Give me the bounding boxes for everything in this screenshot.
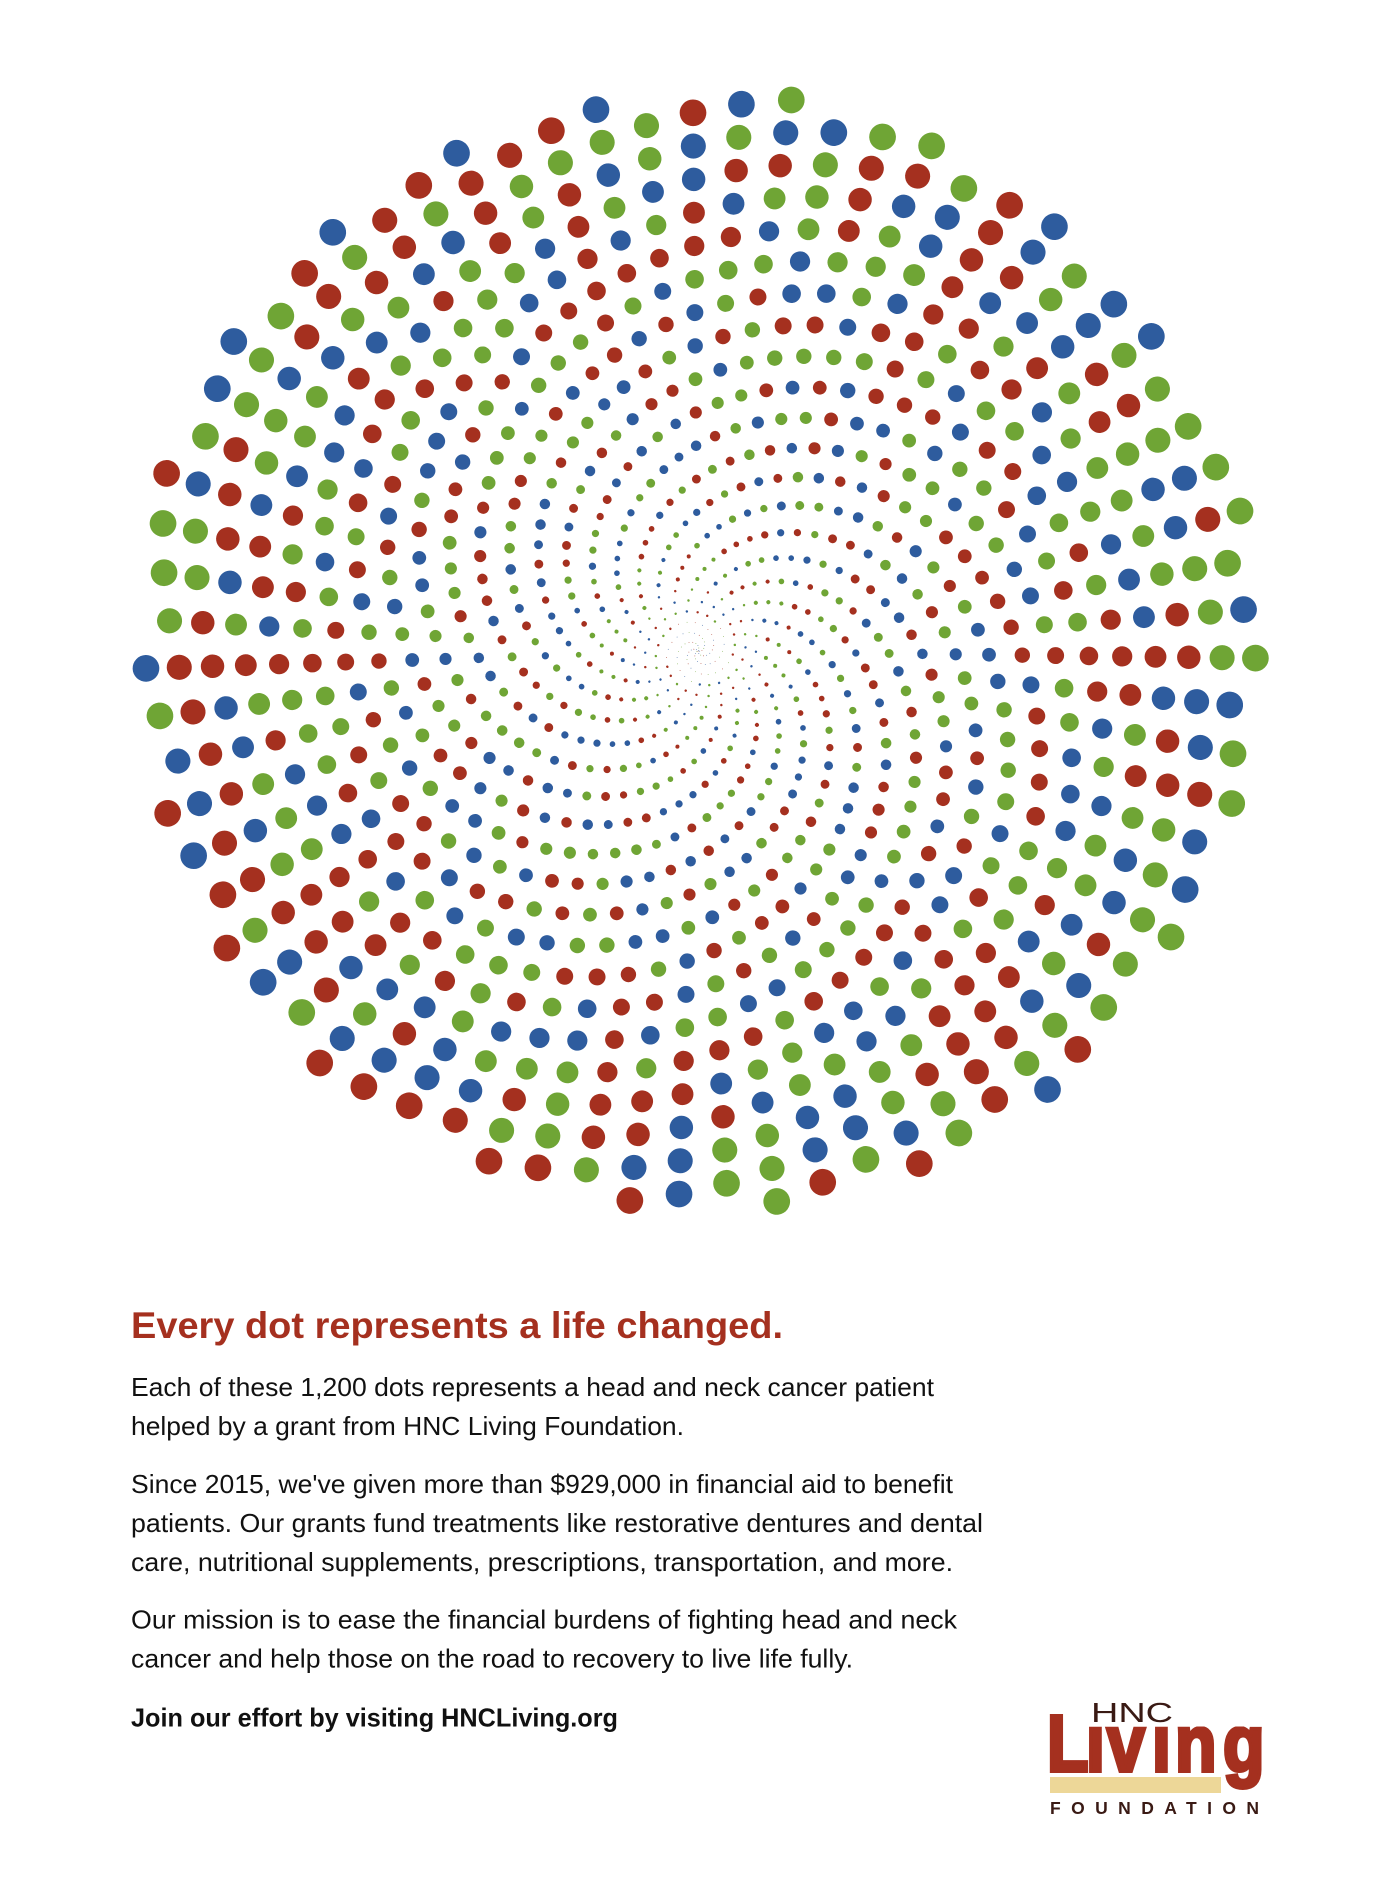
logo text HNC: HNC: [1091, 1697, 1173, 1728]
paragraph: mission: Our mission is to ease the financial burdens of fighting head and neck: [131, 1604, 958, 1634]
paragraph: financial aid: care, nutritional supplements, prescriptions, transportation, and more.: [131, 1547, 953, 1577]
paragraph: financial aid: Since 2015, we've given more than $929,000 in financial aid to benefit: [131, 1469, 954, 1499]
paragraph: dots explanation: [131, 1372, 935, 1441]
paragraph: financial aid: patients. Our grants fund treatments like restorative dentures and dental: [131, 1508, 983, 1538]
logo wordmark Living: Living: [1047, 1699, 1265, 1788]
heading: Every dot represents a life changed.: [131, 1305, 783, 1346]
logo tan bar: [1050, 1777, 1221, 1793]
paragraph: dots explanation: helped by a grant from HNC Living Foundation.: [131, 1411, 684, 1441]
paragraph: dots explanation: Each of these 1,200 dots represents a head and neck cancer patient: [131, 1372, 935, 1402]
paragraph: mission: cancer and help those on the road to recovery to live life fully.: [131, 1644, 853, 1674]
paragraph: mission: [131, 1604, 958, 1674]
logo text FOUNDATION: FOUNDATION: [1050, 1798, 1259, 1818]
spiral of 1,200 coloured dots: [122, 78, 1269, 1218]
logo: HNC Living Foundation: [1047, 1697, 1272, 1818]
call to action: Join our effort by visiting HNCLiving.org: [131, 1702, 618, 1732]
paragraph: financial aid: [131, 1469, 983, 1577]
